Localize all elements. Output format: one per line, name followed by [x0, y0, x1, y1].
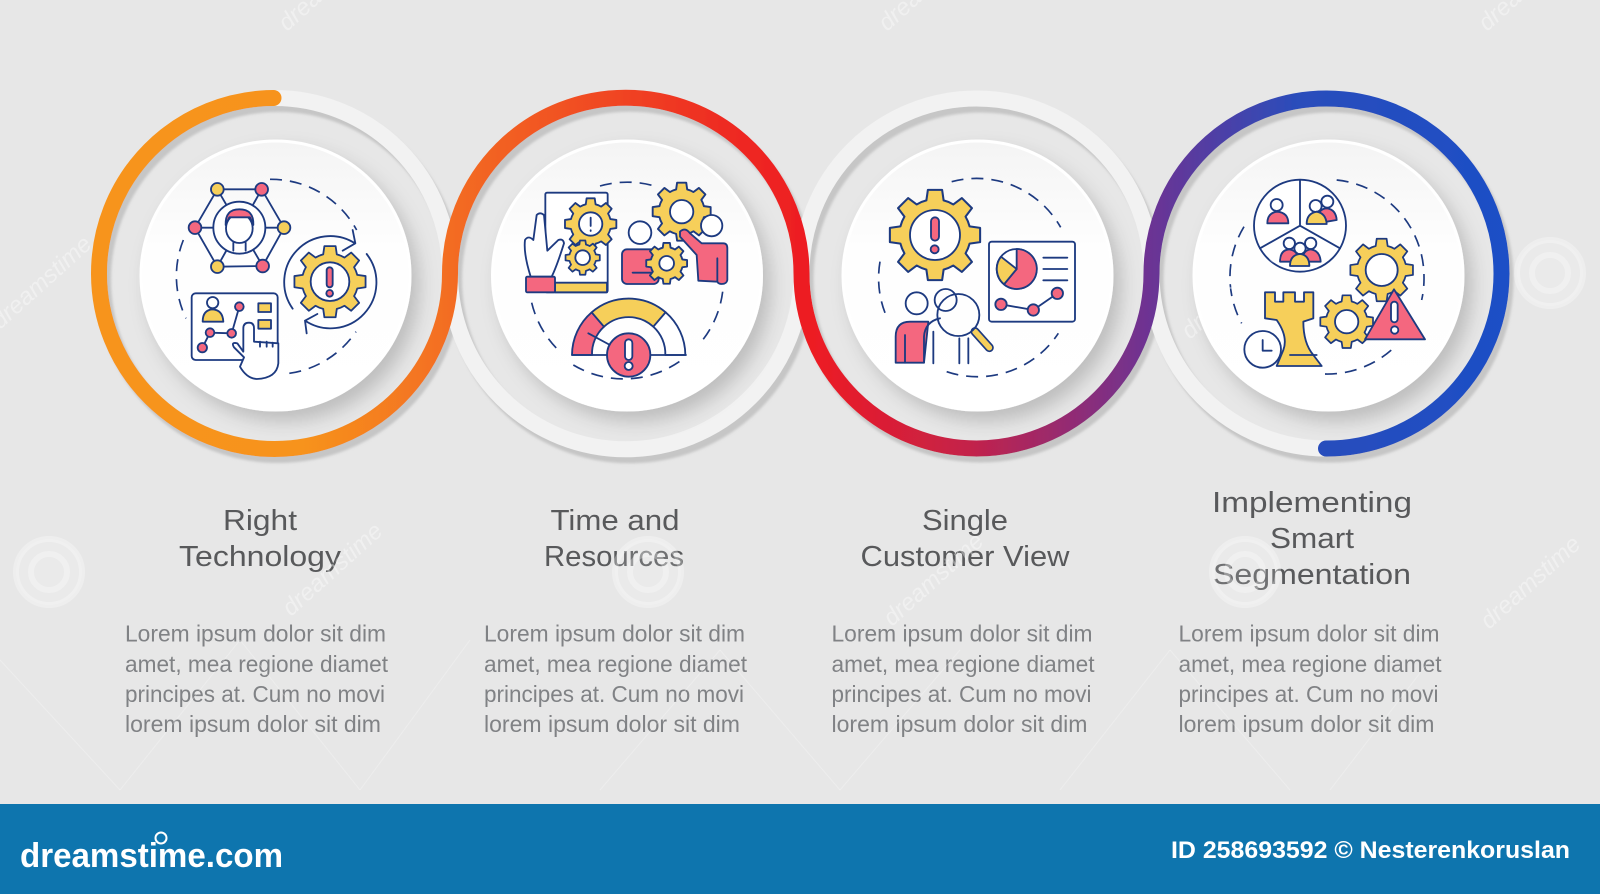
column 3 text	[832, 505, 1095, 737]
text block 4: lorem ipsum dolor sit dim	[1178, 711, 1434, 737]
text block 4: principes at. Cum no movi	[1178, 681, 1438, 707]
watermark overlay: dreamstime	[277, 518, 388, 621]
heading: Time and Resources	[544, 505, 684, 573]
heading: Implementing Smart Segmentation	[1212, 487, 1412, 591]
text block 1: lorem ipsum dolor sit dim	[125, 711, 381, 737]
text block 2: Lorem ipsum dolor sit dim	[484, 620, 745, 646]
text block 1: Lorem ipsum dolor sit dim	[125, 620, 386, 646]
icon: gear, dashboard and people with magnifier	[879, 178, 1075, 377]
text block 2: lorem ipsum dolor sit dim	[484, 711, 740, 737]
panel: step 1 disc and icon	[141, 141, 410, 410]
text block 1: amet, mea regione diamet	[125, 651, 389, 677]
disc 4	[1194, 141, 1463, 410]
text block 2: amet, mea regione diamet	[484, 651, 748, 677]
panel: step 3 disc and icon	[843, 141, 1112, 410]
footer bar	[0, 804, 1600, 894]
heading: Right Technology: Technology	[179, 541, 342, 573]
heading: Single Customer View	[860, 505, 1071, 573]
column 4 text	[1178, 487, 1442, 737]
text block 4: Lorem ipsum dolor sit dim	[1178, 620, 1440, 646]
text block 4: amet, mea regione diamet	[1178, 651, 1442, 677]
icon: tablet, team gears and gauge	[525, 182, 727, 379]
disc 1	[141, 141, 410, 410]
ribbon: continuous looping timeline	[99, 98, 1501, 449]
heading: Time and Resources: Time and	[550, 505, 680, 537]
text block 2	[484, 620, 748, 737]
footer logo text: dreamstime.com	[20, 837, 283, 875]
disc 3	[843, 141, 1112, 410]
footer credit: ID 258693592 © Nesterenkoruslan	[1171, 837, 1570, 864]
text block 1: principes at. Cum no movi	[125, 681, 385, 707]
panel: step 4 disc and icon	[1194, 141, 1463, 410]
column 1 text	[125, 505, 389, 737]
text block 2: principes at. Cum no movi	[484, 681, 744, 707]
heading: Time and Resources: Resources	[544, 541, 684, 573]
text block 3: principes at. Cum no movi	[832, 681, 1092, 707]
icon: segments, rook, gears and warning	[1230, 180, 1425, 374]
heading: Implementing Smart Segmentation: Smart	[1270, 523, 1354, 555]
watermark overlay: dreamstime	[1176, 241, 1287, 344]
watermark overlay: dreamstime	[1475, 531, 1586, 634]
gradient ribbon path	[99, 98, 1501, 449]
text block 3: amet, mea regione diamet	[832, 651, 1095, 677]
icon: network, gear and touch panel	[176, 179, 376, 379]
heading: Right Technology: Right	[223, 505, 297, 537]
heading: Single Customer View: Customer View	[860, 541, 1071, 573]
text block 4	[1178, 620, 1442, 737]
heading: Implementing Smart Segmentation: Implementing	[1212, 487, 1412, 519]
heading: Implementing Smart Segmentation: Segmentation	[1213, 559, 1411, 591]
light track segments	[274, 98, 1326, 449]
text block 3	[832, 620, 1095, 737]
heading: Single Customer View: Single	[922, 505, 1008, 537]
heading: Right Technology	[179, 505, 342, 573]
text block 1	[125, 620, 389, 737]
watermark overlay: dreamstime	[878, 528, 989, 631]
icon: footer logo spiral	[156, 832, 166, 844]
text block 3: Lorem ipsum dolor sit dim	[832, 620, 1092, 646]
panel: step 2 disc and icon	[492, 141, 762, 410]
column 2 text	[484, 505, 748, 737]
text block 3: lorem ipsum dolor sit dim	[832, 711, 1088, 737]
disc 2	[492, 141, 762, 410]
